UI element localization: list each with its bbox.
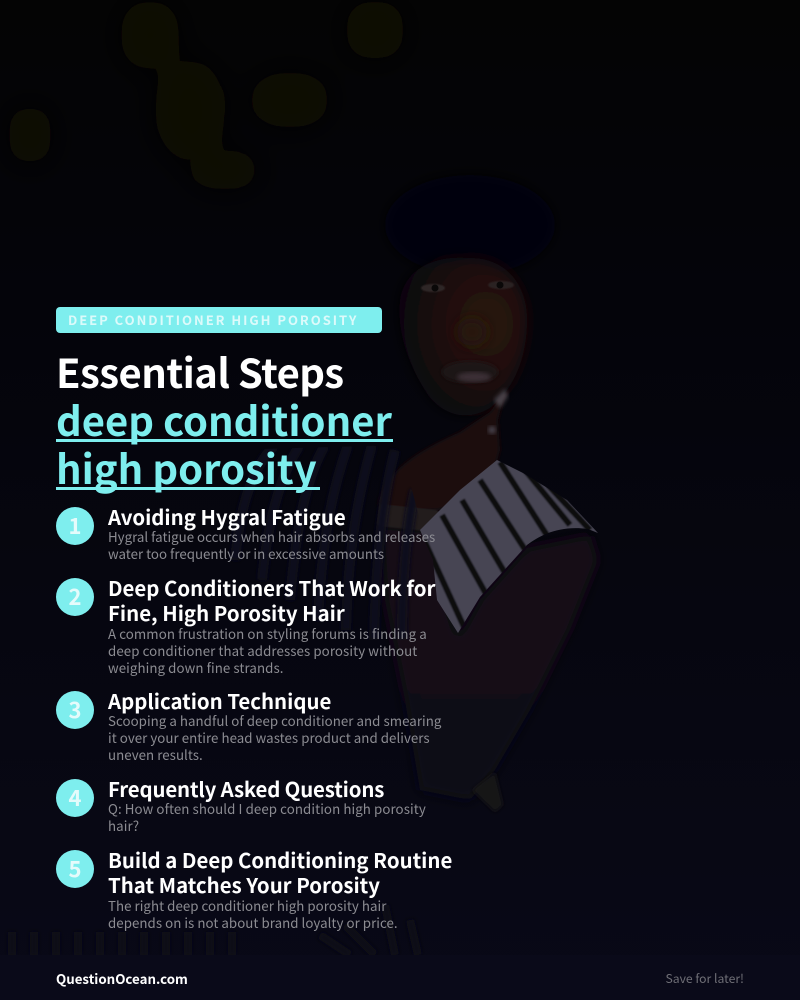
step 2	[56, 572, 436, 677]
step 3 text	[108, 711, 442, 764]
step 4 text: hair?	[108, 816, 139, 835]
step 1	[56, 501, 435, 563]
hair	[385, 175, 555, 275]
tag pill	[56, 307, 382, 333]
step 1 text: water too frequently or in excessive amounts	[108, 544, 384, 563]
figure: shirt left faint stripes	[235, 445, 415, 640]
step 2 text: deep conditioner that addresses porosity without	[108, 641, 417, 660]
title	[56, 342, 393, 496]
number badge 1: 1	[68, 509, 81, 541]
number badge 2: 2	[68, 580, 81, 612]
step 5 heading	[108, 844, 452, 899]
step 4 text: Q: How often should I deep condition high porosity	[108, 799, 426, 818]
step 5 text	[108, 896, 398, 932]
step 3 text: uneven results.	[108, 745, 203, 764]
step 1 text	[108, 527, 435, 563]
figure: wristwatch	[377, 504, 439, 532]
figure: lower shirt faint stripes	[12, 905, 418, 955]
number badge 5: 5	[68, 852, 81, 884]
step 5 heading: That Matches Your Porosity	[108, 869, 380, 899]
step 2 text: weighing down fine strands.	[108, 658, 284, 677]
title: Essential Steps	[56, 342, 344, 400]
step 5 heading: Build a Deep Conditioning Routine	[108, 844, 452, 874]
number badge 3	[56, 691, 94, 729]
title: high porosity	[56, 438, 317, 496]
step 4 text	[108, 799, 426, 835]
step 4	[56, 773, 426, 835]
figure: arm	[380, 525, 598, 800]
number badge 5	[56, 850, 94, 888]
figure: striped shirt right	[420, 460, 598, 633]
tag pill: DEEP CONDITIONER HIGH POROSITY	[68, 310, 358, 329]
step 2 heading	[108, 572, 436, 627]
figure: face	[399, 258, 527, 415]
footer brand: QuestionOcean.com	[56, 969, 188, 988]
step 2 text	[108, 624, 427, 677]
step 5 text: The right deep conditioner high porosity hair	[108, 896, 386, 915]
figure: elbow sleeve detail	[472, 772, 503, 812]
step 4 heading: Frequently Asked Questions	[108, 773, 384, 803]
number badge 2	[56, 578, 94, 616]
footer band	[0, 955, 800, 1000]
number badge 3: 3	[68, 693, 81, 725]
figure: hand at neck	[378, 392, 505, 510]
step 3	[56, 685, 442, 764]
title: deep conditioner	[56, 390, 392, 448]
step 3 text: Scooping a handful of deep conditioner and smearing	[108, 711, 441, 730]
number badge 1	[56, 507, 94, 545]
step 2 heading: Deep Conditioners That Work for	[108, 572, 435, 602]
step 1 text: Hygral fatigue occurs when hair absorbs and releases	[108, 527, 435, 546]
step 2 heading: Fine, High Porosity Hair	[108, 597, 345, 627]
number badge 4	[56, 779, 94, 817]
number badge 4: 4	[68, 781, 81, 813]
step 5	[56, 844, 452, 932]
background foliage glow	[8, 0, 405, 190]
step 2 text: A common frustration on styling forums is finding a	[108, 624, 427, 643]
step 1 heading: Avoiding Hygral Fatigue	[108, 501, 346, 531]
step 3 text: it over your entire head wastes product and delivers	[108, 728, 430, 747]
step 5 text: depends on is not about brand loyalty or price.	[108, 913, 398, 932]
footer call to action: Save for later!	[665, 969, 744, 987]
step 3 heading: Application Technique	[108, 685, 331, 715]
